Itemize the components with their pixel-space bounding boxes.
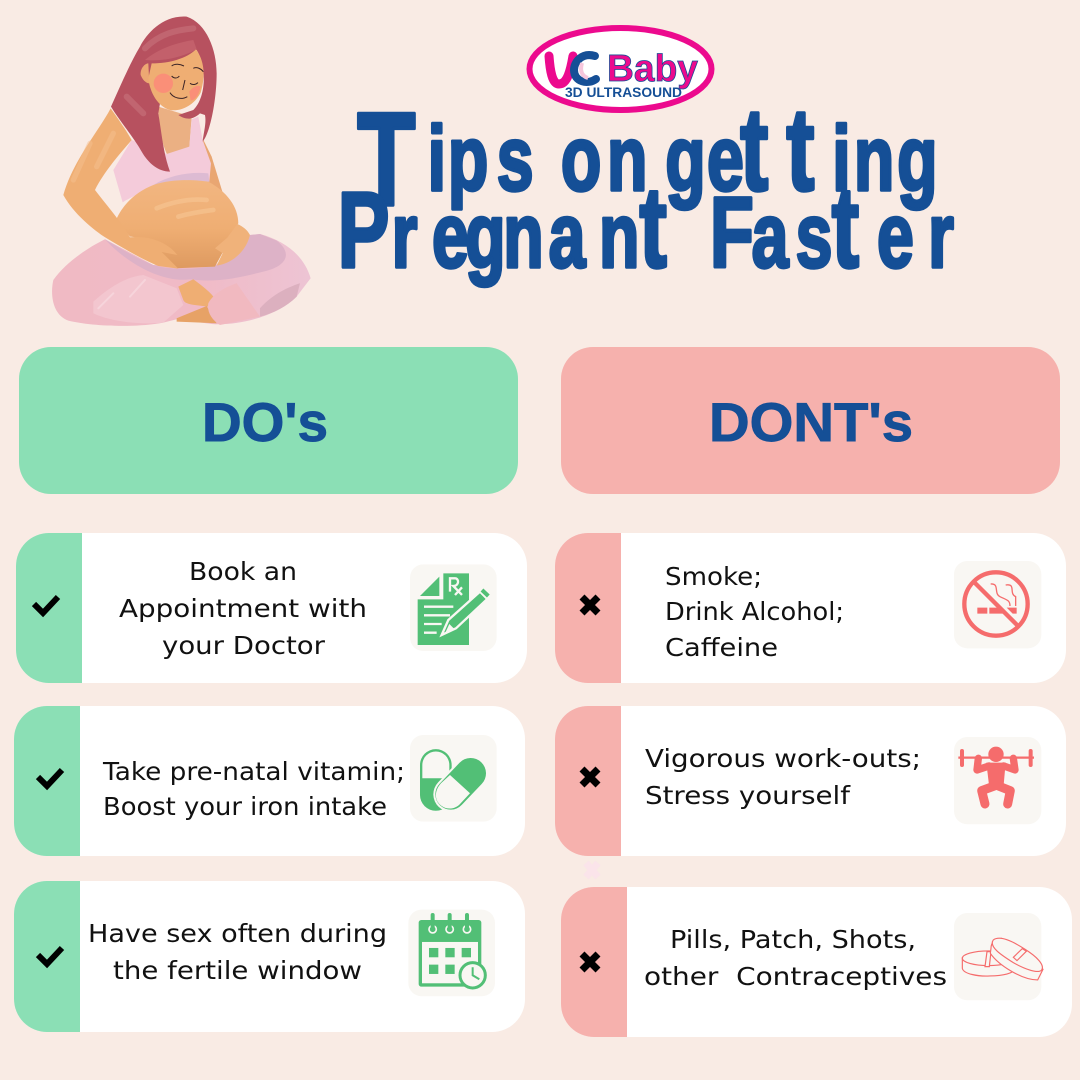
title: tting [740,83,938,215]
icon: cross [582,769,598,785]
title: ips on ge [428,106,744,210]
text: contraceptives [644,925,947,991]
chest and neck [158,107,192,155]
icon: check mark [38,948,62,964]
icon: cross [582,597,598,613]
logo: UC Baby 3D Ultrasound: Baby [607,48,698,90]
logo: UC Baby 3D Ultrasound: 3D ULTRASOUND [565,85,682,100]
near arm [63,108,178,269]
text: vitamins [102,757,405,821]
text: contraceptives: other Contraceptives [644,962,947,991]
text: workouts, stress: Stress yourself [645,781,851,810]
decorative faint cross [586,863,598,877]
panel: DO's header: DO's [202,391,328,453]
near hand on belly [215,224,250,266]
text: smoke, alcohol, caffeine [665,562,844,662]
card: fertile window [14,881,525,1032]
far arm [203,138,223,193]
crop top [113,117,211,202]
title [338,83,954,292]
icon: prescription [410,564,497,651]
text: book an appointment [119,557,367,660]
title: Pregnant Faster [338,164,954,292]
text: smoke, alcohol, caffeine: Smoke; [665,562,762,591]
text: smoke, alcohol, caffeine: Drink Alcohol; [665,597,844,626]
panel: DONT's header: DONT's [709,391,913,453]
text: book an appointment: Appointment with [119,594,367,623]
card: workouts, stress [555,706,1066,856]
icon: capsules [410,735,497,822]
text: contraceptives: Pills, Patch, Shots, [670,925,916,954]
feet [178,279,215,307]
icon: check mark [34,597,58,613]
text: fertile window: the fertile window [113,956,362,985]
text: workouts, stress [645,744,921,810]
icon: pills [954,913,1043,1000]
icon: cross [582,954,598,970]
text: book an appointment: your Doctor [162,631,326,660]
text: workouts, stress: Vigorous work-outs; [645,744,921,773]
title: T [357,84,416,234]
illustration: pregnant woman [52,17,311,326]
icon: calendar [408,910,495,996]
icon: check mark [38,770,62,786]
panel: DO's header [19,347,518,494]
icon: weightlifter [954,737,1041,824]
text: vitamins: Boost your iron intake [103,792,387,821]
card: smoke, alcohol, caffeine [555,533,1066,683]
pants [52,234,311,326]
text: fertile window [88,919,387,985]
card: contraceptives [561,887,1072,1037]
hair [111,17,217,172]
card: vitamins [14,706,525,856]
text: book an appointment: Book an [189,557,297,586]
face [141,63,149,83]
belly [116,180,238,268]
text: smoke, alcohol, caffeine: Caffeine [665,633,778,662]
cuffs [208,283,260,325]
panel: DONT's header [561,347,1060,494]
icon: no smoking [954,561,1041,648]
text: fertile window: Have sex often during [88,919,387,948]
text: vitamins: Take pre-natal vitamin; [102,757,405,786]
card: book an appointment [16,533,527,683]
logo: UC Baby 3D Ultrasound [530,28,712,110]
